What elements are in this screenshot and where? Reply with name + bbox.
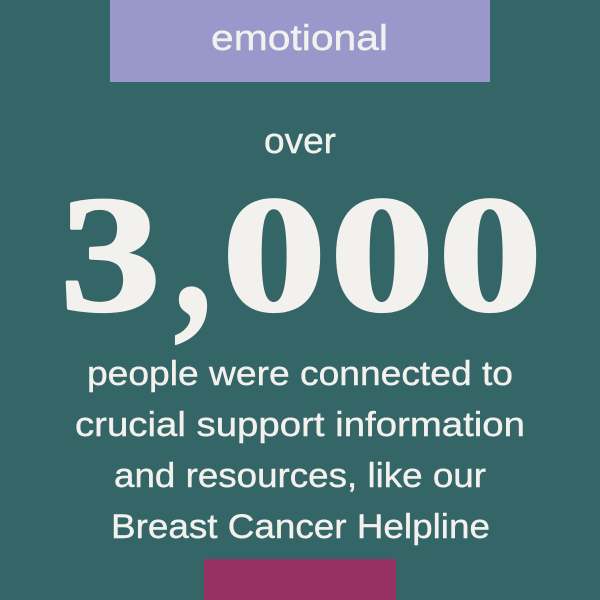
- bottom magenta tab: [204, 559, 396, 600]
- big number: 3,000: 0: [330, 162, 434, 346]
- big number: 3,000: 0: [222, 162, 326, 346]
- description text: [75, 355, 525, 546]
- big number: 3,000: 0: [438, 162, 542, 346]
- description text: people were connected to: [87, 355, 513, 393]
- big number: 3,000: 3: [60, 162, 161, 346]
- description text: crucial support information: [75, 406, 525, 444]
- tab label: emotional: [211, 17, 388, 58]
- lead-in text: over: [264, 120, 336, 161]
- big number: 3,000: ,: [174, 145, 212, 357]
- description text: Breast Cancer Helpline: [111, 508, 490, 546]
- big number: 3,000: [60, 145, 542, 357]
- category tab: emotional: [110, 0, 490, 82]
- description text: and resources, like our: [114, 457, 486, 495]
